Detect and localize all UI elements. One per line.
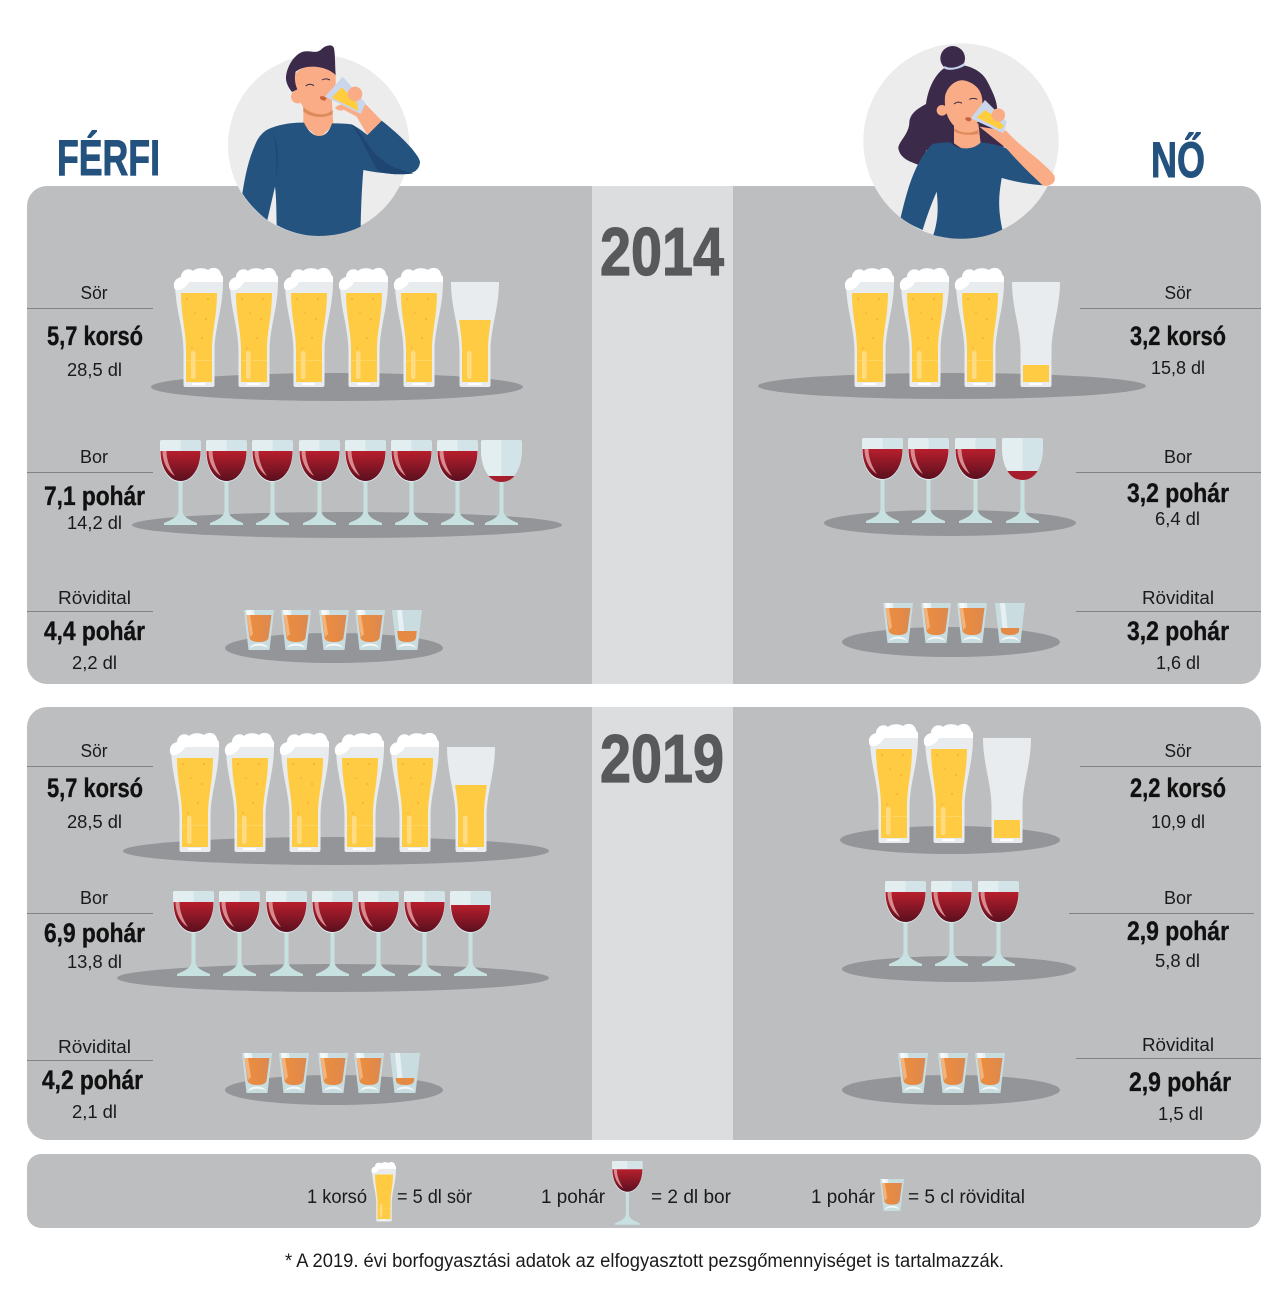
labels: 2019 male: Bor bbox=[80, 888, 108, 908]
legend: beer: = 5 dl sör bbox=[397, 1187, 473, 1208]
legend: beer: 1 korsó bbox=[307, 1187, 367, 1208]
labels: 2019 male: Sör bbox=[80, 741, 108, 761]
illustration: man drinking bbox=[228, 45, 420, 236]
labels: 2014 male bbox=[27, 283, 153, 673]
labels: 2014 female: 15,8 dl bbox=[1151, 358, 1205, 378]
chart: 2019 female spirits bbox=[842, 1053, 1060, 1105]
labels: 2014 male: Rövidital bbox=[58, 588, 131, 608]
labels: 2019 female: Sör bbox=[1164, 741, 1192, 761]
chart: 2014 female spirits bbox=[842, 603, 1060, 657]
panel: legend bbox=[27, 1154, 1261, 1228]
legend: wine: 1 pohár bbox=[541, 1187, 606, 1208]
panel: 2019 bbox=[27, 707, 1261, 1140]
labels: 2014 female: Sör bbox=[1164, 283, 1192, 303]
labels: 2019 female: 1,5 dl bbox=[1158, 1104, 1203, 1124]
chart: 2019 female beer bbox=[840, 724, 1060, 854]
labels: 2014 female: 3,2 pohár bbox=[1127, 478, 1229, 508]
labels: 2014 male: Bor bbox=[80, 447, 108, 467]
labels: 2014 male: 2,2 dl bbox=[72, 653, 117, 673]
chart: 2014 male spirits bbox=[225, 610, 443, 663]
labels: 2019 male: 4,2 pohár bbox=[42, 1065, 143, 1095]
labels: 2014 female: 3,2 pohár bbox=[1127, 616, 1229, 646]
labels: 2014 female: 3,2 korsó bbox=[1130, 321, 1226, 351]
legend: wine: = 2 dl bor bbox=[651, 1187, 732, 1208]
labels: 2019 male bbox=[27, 741, 153, 1122]
chart: 2019 female wine bbox=[842, 881, 1076, 982]
labels: 2019 male: 28,5 dl bbox=[67, 812, 122, 832]
labels: 2019 male: Rövidital bbox=[58, 1037, 131, 1057]
labels: 2019 male: 6,9 pohár bbox=[44, 918, 145, 948]
heading: year 2014: 2014 bbox=[600, 214, 724, 290]
labels: 2014 female: Bor bbox=[1164, 447, 1192, 467]
legend: spirits: = 5 cl rövidital bbox=[908, 1187, 1025, 1208]
labels: 2019 female: 5,8 dl bbox=[1155, 951, 1200, 971]
labels: 2014 male: 7,1 pohár bbox=[44, 481, 145, 511]
labels: 2014 male: 28,5 dl bbox=[67, 360, 122, 380]
labels: 2014 female: 6,4 dl bbox=[1155, 509, 1200, 529]
chart: 2019 male spirits bbox=[225, 1053, 443, 1105]
labels: 2014 male: 4,4 pohár bbox=[44, 616, 145, 646]
chart: 2014 male beer bbox=[151, 268, 523, 401]
labels: 2014 male: 5,7 korsó bbox=[47, 321, 143, 351]
panel: 2014 bbox=[27, 186, 1261, 684]
labels: 2014 female bbox=[1076, 283, 1261, 673]
legend: beer bbox=[307, 1162, 473, 1222]
heading: FÉRFI: FÉRFI bbox=[57, 130, 160, 186]
labels: 2019 female: 2,9 pohár bbox=[1127, 916, 1229, 946]
labels: 2019 female: 2,2 korsó bbox=[1130, 773, 1226, 803]
labels: 2019 male: 13,8 dl bbox=[67, 952, 122, 972]
heading: year 2019: 2019 bbox=[600, 721, 724, 797]
footnote: * A 2019. évi borfogyasztási adatok az elfogyasztott pezsgőmennyiséget is tartalmazzák. bbox=[285, 1251, 1004, 1272]
labels: 2019 female: 2,9 pohár bbox=[1129, 1067, 1231, 1097]
chart: 2019 male beer bbox=[123, 733, 549, 865]
legend: spirits: 1 pohár bbox=[811, 1187, 876, 1208]
legend: spirits bbox=[811, 1179, 1025, 1211]
chart: 2019 male wine bbox=[117, 891, 549, 992]
labels: 2014 female: Rövidital bbox=[1142, 588, 1214, 608]
labels: 2014 female: 1,6 dl bbox=[1156, 653, 1200, 673]
labels: 2014 male: 14,2 dl bbox=[67, 513, 122, 533]
legend: wine bbox=[541, 1161, 732, 1225]
labels: 2019 female: Bor bbox=[1164, 888, 1192, 908]
illustration: woman drinking bbox=[863, 43, 1059, 239]
labels: 2019 female bbox=[1069, 741, 1261, 1124]
chart: 2014 female beer bbox=[758, 268, 1146, 399]
heading: NŐ: NŐ bbox=[1151, 132, 1205, 188]
labels: 2019 male: 5,7 korsó bbox=[47, 773, 143, 803]
labels: 2019 male: 2,1 dl bbox=[72, 1102, 117, 1122]
chart: 2014 male wine bbox=[132, 440, 562, 538]
labels: 2014 male: Sör bbox=[80, 283, 108, 303]
labels: 2019 female: 10,9 dl bbox=[1151, 812, 1205, 832]
chart: 2014 female wine bbox=[824, 438, 1076, 536]
labels: 2019 female: Rövidital bbox=[1142, 1035, 1214, 1055]
